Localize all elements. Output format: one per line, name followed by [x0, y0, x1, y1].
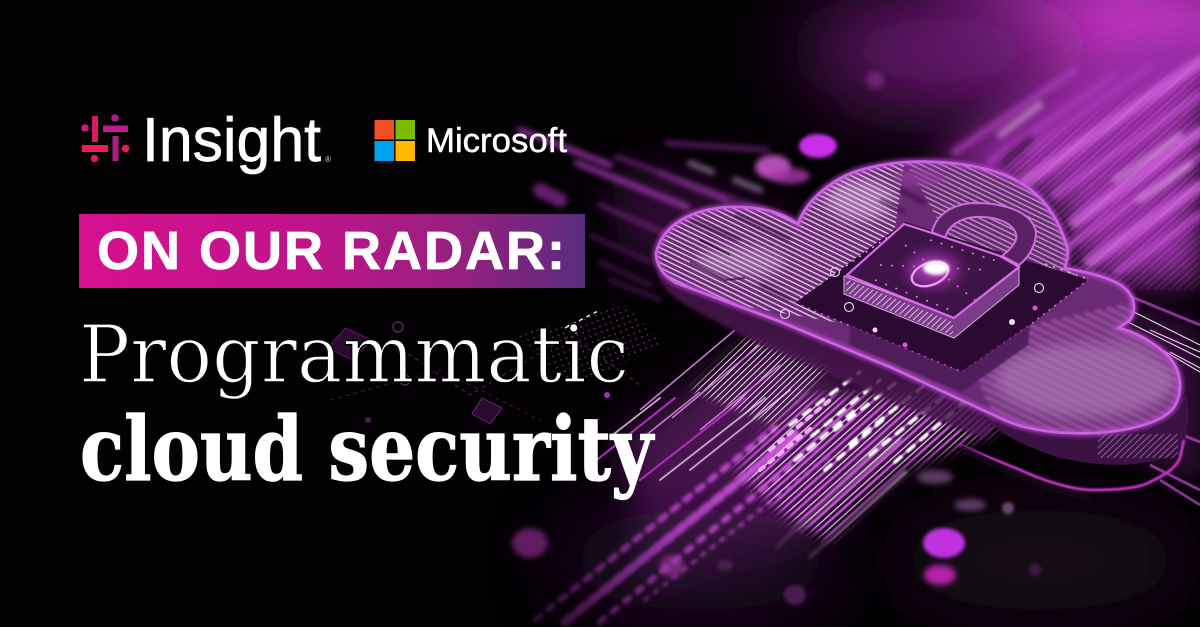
banner: on our radar: ON OUR RADAR: [97, 221, 565, 281]
bokeh blobs [512, 71, 1041, 605]
padlock top dots [875, 240, 1000, 310]
background glow [560, 0, 1200, 610]
upper right blurred traces [955, 62, 1200, 272]
right side stripes [1098, 283, 1200, 505]
padlock shackle [932, 203, 1036, 265]
fingerprint glow [907, 253, 959, 291]
circuit dotted field and dashed paths [328, 305, 665, 424]
Microsoft wordmark: Microsoft [426, 122, 568, 160]
padlock front face [844, 268, 1019, 338]
padlock icon [844, 203, 1036, 338]
upper right sharper highlights [1000, 60, 1200, 290]
lower left blurred bead traces [535, 428, 905, 622]
central circuit traces [640, 325, 1010, 545]
logo: Insight [81, 106, 331, 175]
Insight wordmark: Insight [142, 106, 321, 175]
logo: Microsoft [374, 120, 568, 161]
title [79, 308, 655, 501]
cloud [650, 160, 1190, 440]
blurred traces left of cloud [520, 130, 770, 300]
central chip [780, 222, 1088, 392]
cloud lower wall [656, 270, 1189, 497]
registered mark: ® [325, 155, 331, 164]
padlock side texture [846, 279, 953, 336]
title line 1: Programmatic [79, 308, 629, 401]
Microsoft squares [374, 120, 415, 161]
Insight mark [81, 114, 129, 162]
sharper traces beside title [593, 390, 790, 480]
padlock top face [847, 224, 1019, 318]
title line 2: cloud security [80, 397, 655, 501]
